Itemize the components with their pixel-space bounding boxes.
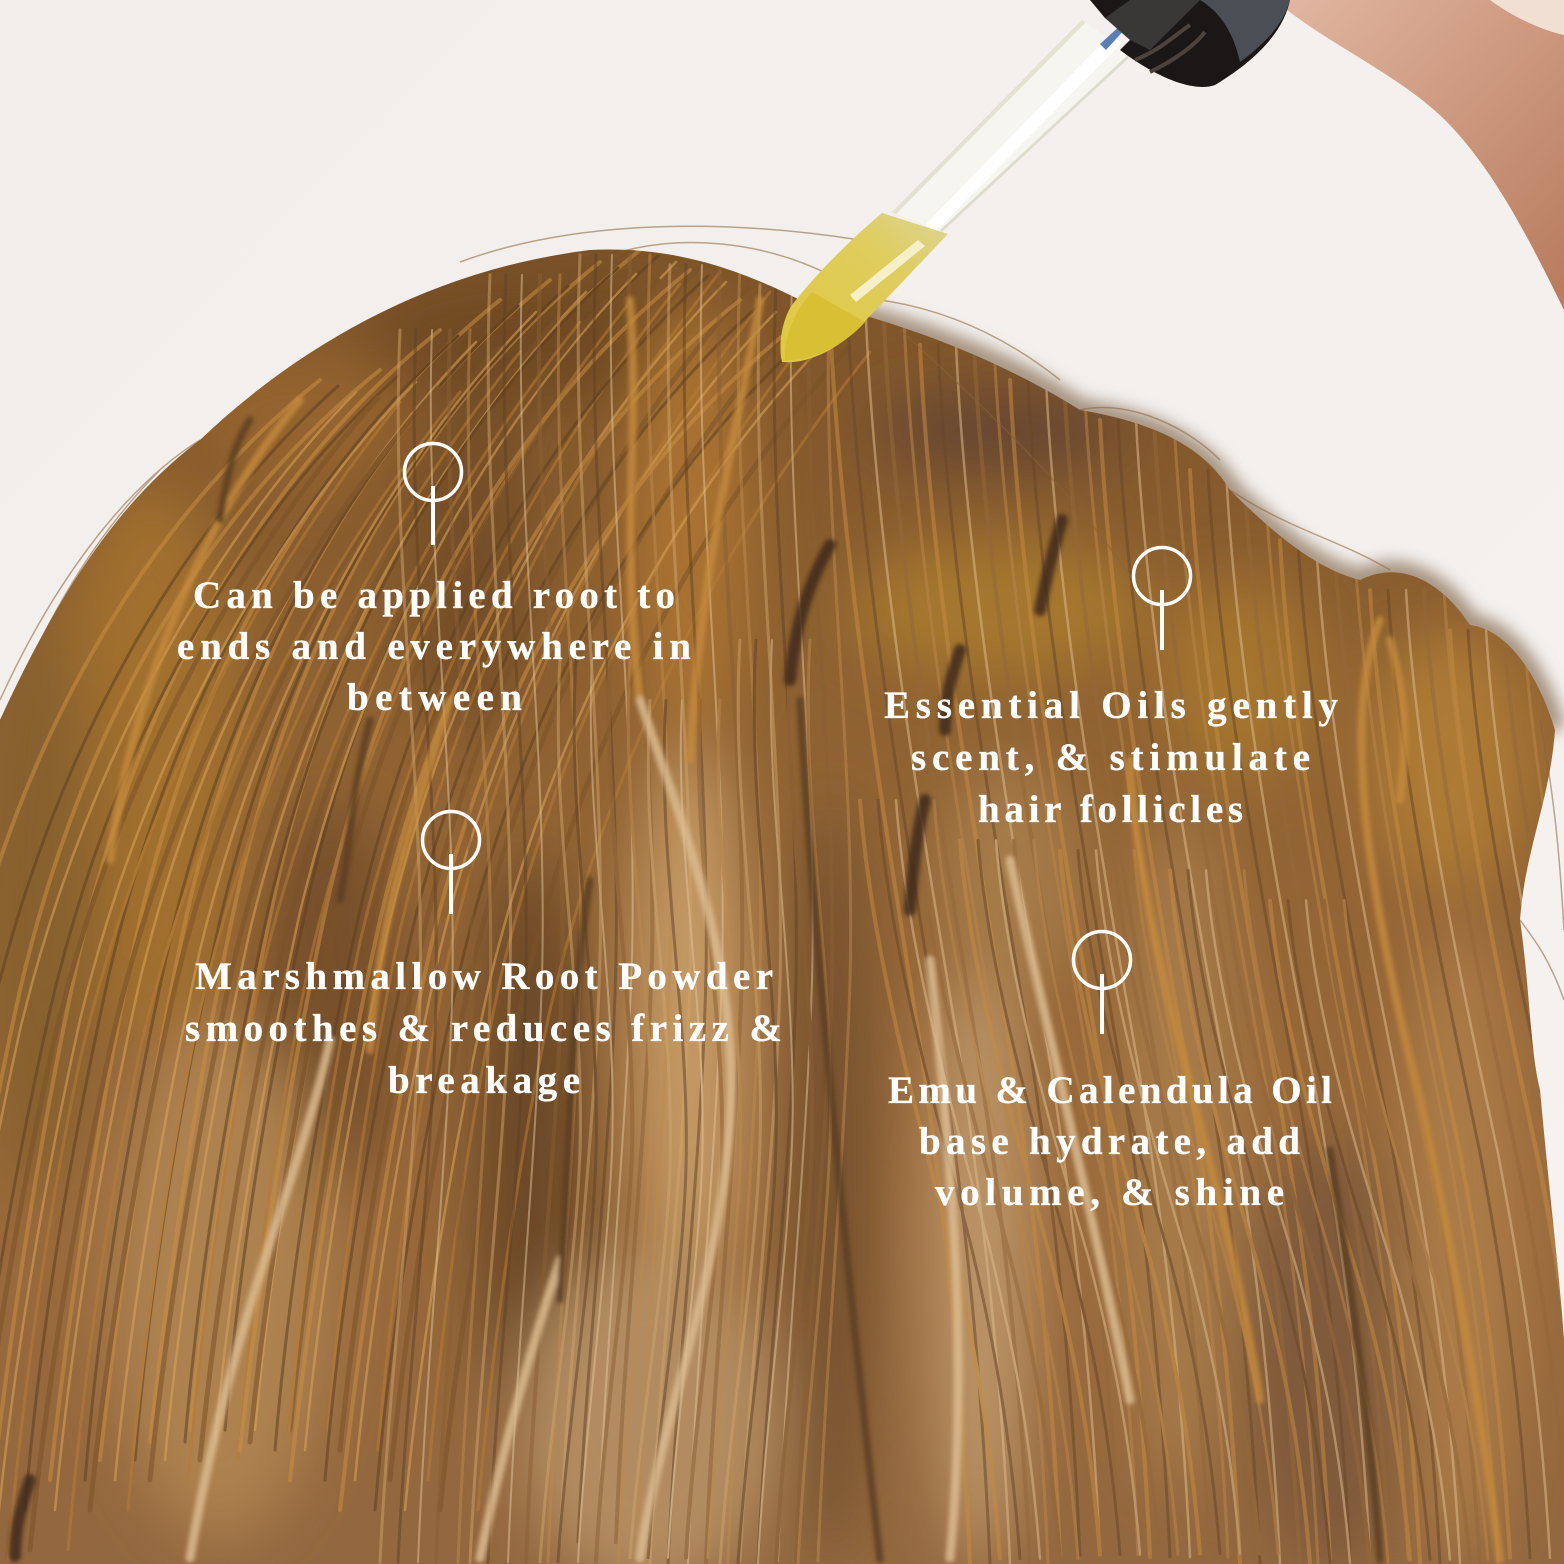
photo: hand holding dropper xyxy=(1275,0,1564,310)
caption: emu and calendula xyxy=(888,1069,1332,1214)
strand bundles: left sweep xyxy=(0,250,870,1560)
glass tube xyxy=(892,20,1132,232)
caption: essential oils: scent, & stimulate xyxy=(911,736,1310,779)
caption: essential oils: Essential Oils gently xyxy=(884,684,1338,727)
caption: root to ends: Can be applied root to xyxy=(193,574,675,617)
pin icon: essential oils xyxy=(1134,548,1190,650)
caption: marshmallow root: smoothes & reduces frizz & xyxy=(185,1007,782,1050)
caption: marshmallow root xyxy=(185,955,782,1102)
caption: root to ends: between xyxy=(347,676,522,719)
flyaway hairs xyxy=(0,226,1564,1000)
callout: essential oils xyxy=(884,548,1338,831)
pin icon: emu and calendula xyxy=(1074,932,1130,1034)
strand bundles: right fall xyxy=(830,320,1564,1564)
caption: marshmallow root: breakage xyxy=(388,1059,580,1102)
mid strands xyxy=(15,300,1500,1560)
caption: emu and calendula: volume, & shine xyxy=(935,1171,1284,1214)
caption: emu and calendula: Emu & Calendula Oil xyxy=(888,1069,1332,1112)
callout: marshmallow root xyxy=(185,812,782,1102)
caption: marshmallow root: Marshmallow Root Powder xyxy=(195,955,773,998)
rubber collar xyxy=(1090,0,1290,87)
photo: glass dropper with oil xyxy=(780,0,1290,362)
caption: essential oils xyxy=(884,684,1338,831)
callout: emu and calendula xyxy=(888,932,1332,1214)
pin icon: root to ends xyxy=(404,444,462,545)
pin icon: marshmallow root xyxy=(422,812,480,914)
caption: root to ends: ends and everywhere in xyxy=(177,625,691,668)
strand bundles: centre fall xyxy=(380,255,851,1564)
caption: root to ends xyxy=(177,574,691,719)
soft hair edge xyxy=(850,312,1555,730)
caption: emu and calendula: base hydrate, add xyxy=(919,1120,1300,1163)
caption: essential oils: hair follicles xyxy=(978,788,1243,831)
callout: root to ends xyxy=(177,444,691,719)
oil xyxy=(780,213,948,362)
